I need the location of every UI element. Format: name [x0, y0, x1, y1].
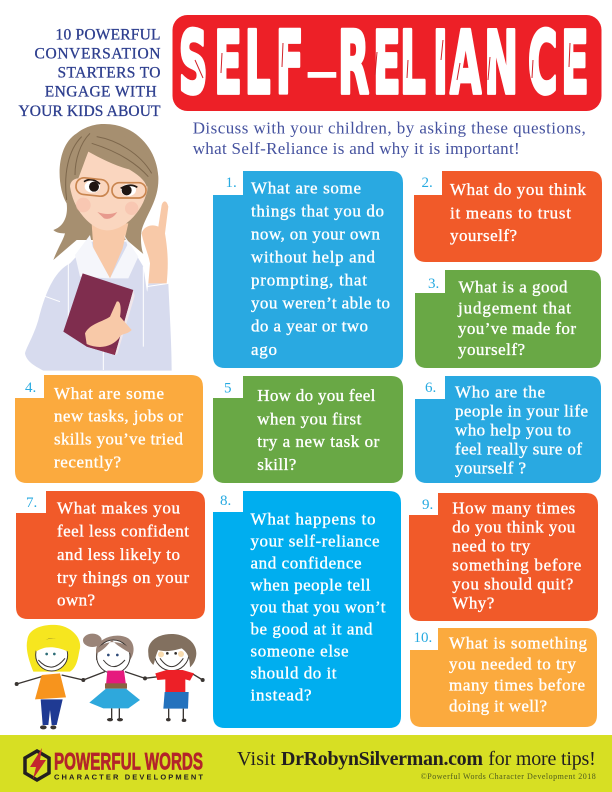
question 3 card: yourself?	[458, 340, 525, 359]
question 1 card: now, on your own	[251, 225, 380, 244]
title banner: Self-Reliance: -	[304, 47, 340, 96]
question 6 card: people in your life	[455, 401, 588, 420]
question 8 card	[213, 491, 401, 728]
question 6 card: 6.	[425, 380, 436, 396]
child 2	[83, 634, 102, 647]
question 9 card: something before	[452, 556, 581, 575]
title banner: Self-Reliance: RELIANCE	[338, 12, 589, 114]
question 4 card: What are some	[54, 384, 164, 403]
child 1	[27, 625, 80, 672]
arms	[17, 672, 203, 684]
shirt	[25, 242, 172, 371]
question 6 card	[415, 376, 601, 483]
holding hand	[85, 301, 132, 347]
question 10 card: What is something	[449, 633, 588, 652]
title banner: Self-Reliance: SELF	[179, 12, 304, 114]
question 8 card: instead?	[250, 686, 312, 705]
question 4 card: recently?	[54, 453, 121, 472]
question 8 card: What happens to	[250, 509, 376, 528]
question 3 card	[415, 270, 601, 368]
hair front	[73, 131, 155, 187]
question 6 card: who help you to	[455, 420, 571, 439]
book	[63, 273, 133, 355]
question 1 card: prompting, that	[251, 271, 367, 290]
question 7 card: 7.	[26, 495, 37, 511]
question 7 card: try things on your	[57, 568, 189, 587]
question 10 card: doing it well?	[449, 697, 547, 716]
logo wordmark	[54, 748, 203, 782]
cheeks and mouth	[76, 198, 91, 212]
question 9 card: Why?	[452, 593, 494, 612]
question 3 card: judgement that	[457, 298, 571, 317]
intro text: Discuss with your children, by asking these questions,	[193, 118, 586, 138]
question 9 card	[409, 493, 598, 621]
question 6 card: feel really sure of	[455, 440, 582, 459]
question 1 card: do a year or two	[251, 317, 368, 336]
face	[70, 152, 147, 230]
footer band	[0, 735, 612, 792]
question 7 card: feel less confident	[57, 522, 189, 541]
question 1 card: things that you do	[251, 202, 384, 221]
question 9 card: do you think you	[452, 517, 576, 536]
question 8 card: 8.	[220, 493, 231, 509]
question 8 card: when people tell	[250, 575, 371, 594]
raised hand	[142, 201, 168, 283]
intro text: what Self-Reliance is and why it is important!	[193, 139, 520, 158]
question 6 card: yourself ?	[455, 459, 526, 478]
question 4 card	[15, 375, 203, 483]
neck	[92, 223, 128, 278]
question 5 card: skill?	[257, 455, 296, 474]
question 9 card: you should quit?	[452, 575, 573, 594]
heading: conversation starters: 10 POWERFUL	[56, 26, 160, 44]
question 10 card: you needed to try	[449, 654, 576, 673]
question 9 card: How many times	[452, 498, 575, 517]
heading: conversation starters: YOUR KIDS ABOUT	[18, 103, 161, 120]
collar	[75, 235, 138, 278]
question 10 card	[410, 628, 597, 727]
question 5 card: try a new task or	[257, 432, 380, 451]
question 5 card: How do you feel	[257, 386, 376, 405]
question 5 card: when you first	[257, 409, 362, 428]
heading: conversation starters: CONVERSATION	[34, 46, 160, 63]
question 3 card: you’ve made for	[458, 319, 576, 338]
logo: hexagon bolt	[25, 748, 49, 780]
question 3 card: 3.	[428, 276, 439, 292]
website callout	[237, 748, 596, 770]
question 2 card	[414, 171, 602, 262]
logo wordmark: POWERFUL WORDS	[54, 748, 203, 776]
question 5 card	[213, 376, 403, 483]
question 9 card: 9.	[422, 497, 433, 513]
question 1 card: you weren’t able to	[251, 294, 390, 313]
question 2 card: it means to trust	[450, 203, 571, 222]
shirt seams	[37, 263, 168, 370]
question 5 card: 5	[224, 380, 232, 396]
question 1 card	[213, 171, 403, 368]
question 7 card	[16, 491, 205, 619]
title banner: Self-Reliance	[172, 12, 602, 114]
question 8 card: you that you won’t	[250, 598, 386, 617]
question 4 card: skills you’ve tried	[54, 430, 184, 449]
question 7 card: What makes you	[57, 499, 180, 518]
question 1 card: without help and	[251, 248, 376, 267]
illustration: woman with book	[25, 124, 172, 371]
question 8 card: someone else	[250, 642, 348, 661]
heading: conversation starters	[18, 26, 161, 120]
question 2 card: yourself?	[450, 226, 517, 245]
question 10 card: 10.	[414, 630, 432, 646]
question 7 card: own?	[57, 591, 95, 610]
question 2 card: 2.	[422, 175, 433, 191]
question 1 card: What are some	[251, 178, 361, 198]
question 8 card: your self-reliance	[250, 531, 380, 550]
website callout: DrRobynSilverman.com	[281, 748, 483, 770]
question 1 card: ago	[251, 340, 277, 359]
child 3	[154, 636, 189, 671]
intro text	[193, 118, 586, 158]
question 4 card: new tasks, jobs or	[54, 407, 183, 426]
heading: conversation starters: STARTERS TO	[58, 65, 160, 82]
question 1 card: 1.	[226, 175, 237, 191]
question 9 card: need to try	[452, 536, 531, 555]
question 3 card: What is a good	[458, 277, 568, 296]
question 2 card: What do you think	[450, 180, 586, 199]
question 6 card: Who are the	[455, 382, 545, 401]
copyright: ©Powerful Words Character Development 2018	[421, 772, 596, 781]
heading: conversation starters: ENGAGE WITH	[45, 84, 157, 101]
glasses and eyes	[75, 177, 146, 198]
logo wordmark: CHARACTER DEVELOPMENT	[54, 772, 203, 782]
website callout: Visit	[237, 748, 276, 770]
question 8 card: and confidence	[250, 553, 362, 572]
question 4 card: 4.	[25, 380, 36, 396]
question 7 card: and less likely to	[57, 545, 180, 564]
question 10 card: many times before	[449, 675, 585, 694]
question 8 card: should do it	[250, 664, 337, 683]
website callout: for more tips!	[488, 748, 596, 770]
illustration: three children holding hands	[15, 625, 205, 729]
hair back	[53, 124, 158, 260]
question 8 card: be good at it and	[250, 620, 373, 639]
